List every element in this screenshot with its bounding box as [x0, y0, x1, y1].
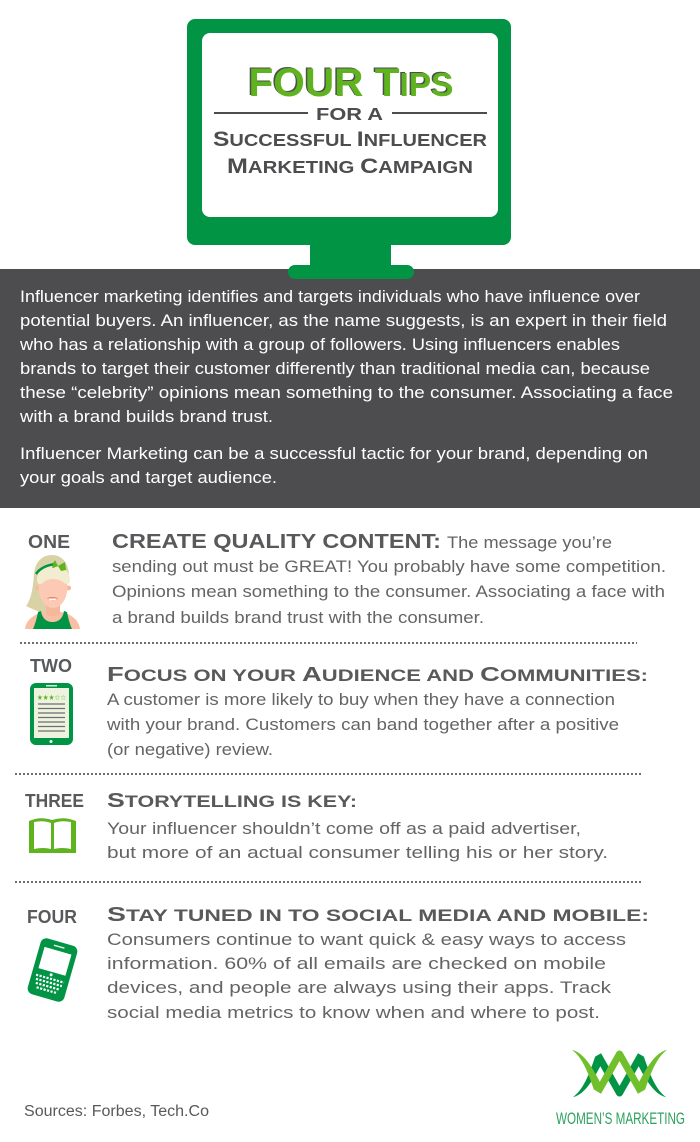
text block: tip four body: devices, and people are always using their apps. Track [107, 978, 612, 997]
panel: tip four [26, 903, 649, 1022]
icon: open book [29, 818, 76, 853]
label: four: FOUR [27, 907, 77, 927]
text block: intro paragraph one: who has a relationship with a group of followers. Using influencers enables [19, 335, 620, 354]
text block: intro paragraph two [20, 444, 648, 487]
panel: intro band [0, 269, 700, 508]
text block: tip two body: with your brand. Customers can band together after a positive [106, 715, 619, 734]
heading: four tips: FOUR TIPS [248, 61, 454, 105]
label: two: TWO [30, 656, 72, 676]
text block: tip four body [107, 930, 626, 1022]
text block: tip three body [107, 819, 608, 862]
text block: tip two body: A customer is more likely to buy when they have a connection [107, 690, 615, 709]
label: three: THREE [25, 791, 84, 811]
heading: stay tuned in: S TAY TUNED IN TO SOCIAL MEDIA AND MOBILE: [107, 903, 649, 926]
heading: four tips: FOUR TIPS [247, 60, 452, 104]
panel: tip one [25, 530, 666, 629]
icon: smartphone [26, 937, 79, 1003]
text block: intro paragraph one [19, 287, 673, 426]
heading: create quality content: CREATE QUALITY CONTENT: [112, 530, 441, 553]
text block: intro paragraph two: Influencer Marketing can be a successful tactic for your brand, depending on [20, 444, 648, 463]
heading: focus on your audience: F OCUS ON YOUR A UDIENCE AND C OMMUNITIES: [107, 663, 648, 686]
title [213, 60, 487, 178]
icon: woman influencer [25, 555, 80, 629]
text block: intro paragraph one: Influencer marketing identifies and targets individuals who have influence over [20, 287, 640, 306]
text block: intro paragraph one: with a brand builds brand trust. [19, 407, 273, 426]
text block: tip one body: The message you’re [447, 533, 612, 552]
text block: sources: Sources: Forbes, Tech.Co [24, 1103, 209, 1120]
text block: tip one body [112, 533, 666, 627]
text block: tip three body: Your influencer shouldn’t come off as a paid advertiser, [107, 819, 581, 838]
heading: storytelling is key: STORYTELLING IS KEY: [107, 789, 357, 812]
panel: tip two [30, 656, 648, 759]
text block: tip four body: Consumers continue to want quick & easy ways to access [107, 930, 626, 949]
text block: tip three body: but more of an actual consumer telling his or her story. [107, 843, 608, 862]
title: SUCCESSFUL INFLUENCER [213, 127, 487, 151]
text block: tip one body: Opinions mean something to the consumer. Associating a face with [112, 582, 665, 601]
text block: intro paragraph one: potential buyers. An influencer, as the name suggests, is an expert in their field [20, 311, 667, 330]
logo: women's marketing [556, 1050, 685, 1128]
title: MARKETING CAMPAIGN [227, 154, 473, 178]
text block: tip four body: information. 60% of all emails are checked on mobile [107, 954, 606, 973]
text block: tip four body: social media metrics to know when and where to post. [107, 1003, 600, 1022]
text block: intro paragraph one: brands to target their customer differently than traditional media can, because [20, 359, 650, 378]
text block: tip one body: sending out must be GREAT! You probably have some competition. [112, 557, 666, 576]
text block: intro paragraph one: these “celebrity” opinions mean something to the consumer. Associating a face [20, 383, 673, 402]
text block: tip one body: a brand builds brand trust with the consumer. [112, 608, 484, 627]
icon: tablet with review: ★★★☆☆ [37, 693, 66, 702]
panel: tip three [25, 789, 608, 862]
text block: tip two body: (or negative) review. [107, 740, 273, 759]
icon: tablet with review [30, 683, 73, 745]
label: one: ONE [28, 532, 70, 552]
title: FOR A [316, 104, 383, 124]
text block: intro paragraph two: your goals and target audience. [20, 468, 277, 487]
text block: tip two body [106, 690, 619, 759]
icon: monitor [187, 19, 511, 279]
